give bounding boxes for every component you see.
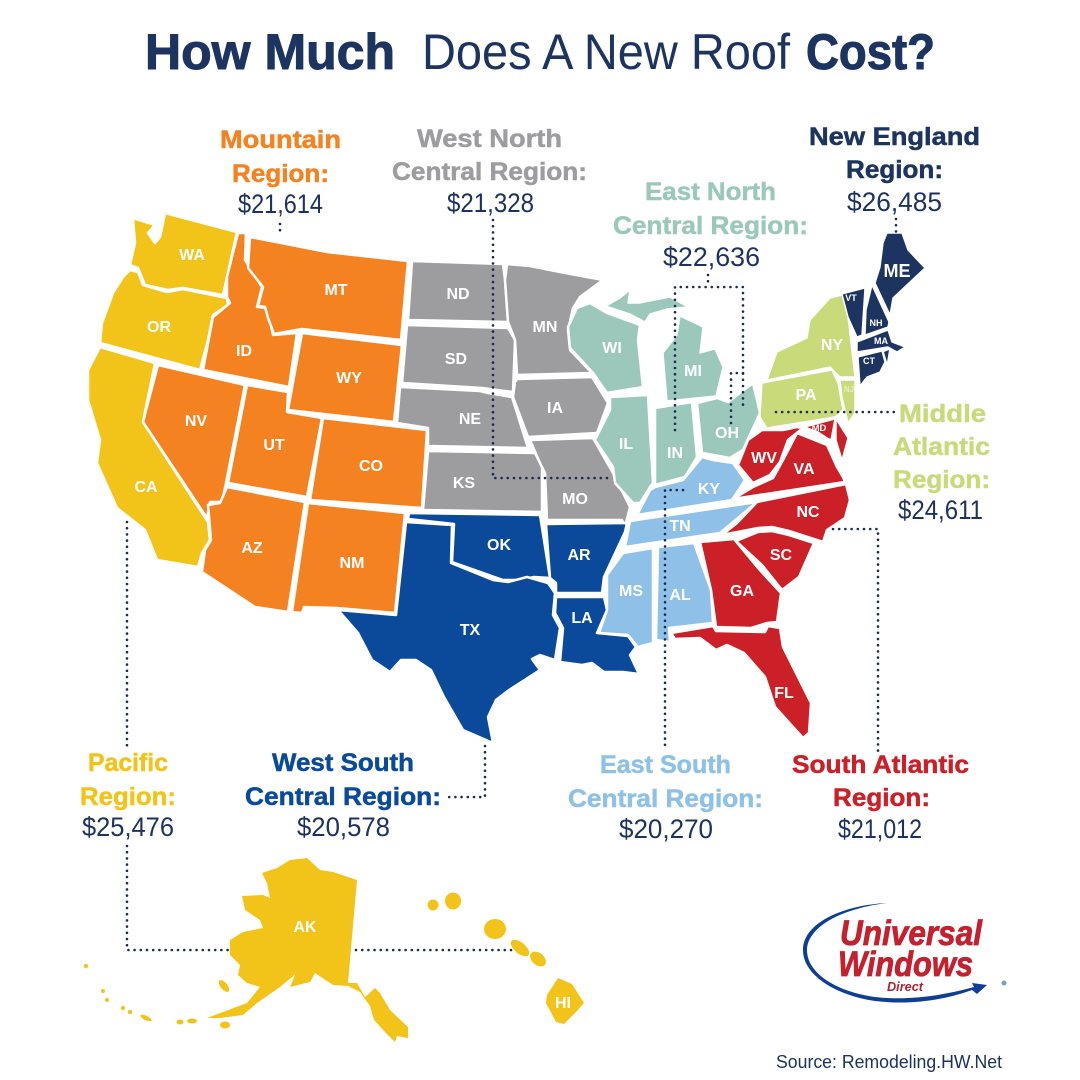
label: West South Central Region: $20,578	[297, 812, 390, 842]
state: WV: WV	[751, 450, 777, 467]
label: East South Central Region	[568, 751, 763, 844]
state: ID: ID	[236, 343, 252, 360]
state: ID	[203, 233, 297, 387]
state: CT: CT	[863, 356, 875, 366]
region: West North Central states	[397, 261, 630, 527]
state: VA: VA	[793, 461, 815, 478]
state: WV	[738, 427, 803, 483]
label: Mountain Region: Region:	[232, 160, 329, 188]
state: IN	[655, 402, 697, 485]
label: East South Central Region: East South	[600, 751, 731, 779]
state: CA: CA	[134, 479, 158, 496]
state: LA: LA	[571, 610, 593, 627]
region: West South Central states	[338, 513, 639, 743]
state: KS: KS	[453, 475, 475, 492]
label: East North Central Region	[613, 178, 808, 272]
state: MA	[857, 330, 905, 352]
state: WA: WA	[179, 247, 205, 264]
state: NC	[722, 484, 850, 542]
state: PA: PA	[795, 387, 817, 404]
state: AZ: AZ	[241, 540, 263, 557]
state: CO	[310, 418, 427, 508]
map: Hawaii: HI	[555, 995, 571, 1012]
state: WI	[568, 303, 643, 393]
state: AR	[546, 523, 627, 593]
state: MN: MN	[533, 319, 557, 336]
state: MS: MS	[619, 583, 643, 600]
region: East North Central states	[568, 290, 760, 503]
title: Cost?	[806, 24, 935, 80]
state: MN	[505, 264, 603, 375]
label: Pacific Region: Region:	[80, 783, 176, 811]
state: NV: NV	[185, 413, 207, 430]
state: TX	[338, 522, 560, 743]
state: FL: FL	[774, 685, 794, 702]
state: UT	[228, 385, 322, 497]
state: UT: UT	[263, 437, 285, 454]
state: NM: NM	[340, 555, 364, 572]
title	[145, 24, 935, 80]
state: TX: TX	[460, 622, 481, 639]
state: IL	[595, 395, 653, 503]
region: Middle Atlantic states	[760, 295, 855, 428]
label: Pacific Region	[80, 749, 176, 842]
state: SD: SD	[445, 351, 467, 368]
state: GA: GA	[730, 583, 754, 600]
state: CO: CO	[359, 458, 383, 475]
logo: Universal Windows Direct: Universal	[840, 914, 983, 953]
state: VT: VT	[845, 293, 857, 303]
label: South Atlantic Region: Region:	[833, 784, 930, 812]
state: WI: WI	[602, 340, 622, 357]
state: NE	[397, 387, 528, 448]
label: West North Central Region	[392, 125, 587, 218]
label: West South Central Region	[245, 749, 441, 842]
state: VT	[842, 288, 865, 337]
state: NM	[292, 503, 405, 613]
label: East South Central Region: $20,270	[619, 814, 713, 844]
label: West North Central Region: West North	[417, 125, 562, 153]
state: LA	[555, 597, 639, 674]
label: West South Central Region: Central Region:	[245, 783, 441, 811]
state: KY: KY	[698, 481, 720, 498]
state: NE: NE	[459, 411, 481, 428]
state: AL: AL	[669, 587, 691, 604]
region: South Atlantic states	[671, 419, 850, 738]
state: CT	[858, 351, 885, 386]
region: New England states	[842, 233, 925, 386]
state: OK	[408, 513, 550, 580]
state: SC: SC	[770, 547, 793, 564]
state: AR: AR	[567, 547, 591, 564]
alaska islands	[84, 964, 231, 1028]
label: East South Central Region: Central Region:	[568, 785, 763, 813]
state: NV	[143, 365, 245, 518]
connector lines	[127, 219, 896, 950]
state: TN	[625, 502, 757, 547]
state: NC: NC	[796, 504, 820, 521]
label: West North Central Region: $21,328	[447, 188, 534, 218]
logo swoosh arrow	[803, 903, 987, 1003]
state: KY	[637, 457, 745, 515]
label: New England Region	[809, 123, 980, 217]
state: CA	[88, 347, 210, 567]
state: MA: MA	[874, 336, 888, 346]
state: OH: OH	[715, 425, 739, 442]
logo: Universal Windows Direct	[803, 903, 1006, 1003]
map: Hawaii	[428, 892, 584, 1024]
label: West North Central Region: Central Region:	[392, 158, 587, 186]
label: Middle Atlantic Region: Atlantic	[893, 433, 990, 461]
state: WA	[130, 213, 237, 295]
state: NJ: NJ	[844, 385, 854, 394]
state: IA: IA	[547, 400, 563, 417]
state: SC	[736, 531, 814, 590]
label: Middle Atlantic Region: Middle	[899, 400, 986, 428]
map: contiguous states	[88, 213, 925, 743]
label: Middle Atlantic Region	[893, 400, 990, 525]
state: MT: MT	[324, 282, 348, 299]
map: Alaska	[84, 858, 408, 1042]
state: SD	[402, 325, 515, 392]
state: RI	[884, 350, 889, 362]
label: New England Region: $26,485	[847, 187, 942, 217]
label: New England Region: New England	[809, 123, 980, 151]
state: MD: MD	[812, 423, 827, 434]
state: IA	[513, 377, 608, 437]
region: Mountain states	[143, 233, 427, 613]
label: East North Central Region: Central Region:	[613, 212, 808, 240]
label: South Atlantic Region	[792, 751, 969, 844]
title: How Much	[145, 24, 395, 80]
state: ND	[408, 261, 508, 322]
state: WY: WY	[336, 370, 362, 387]
label: East North Central Region: $22,636	[663, 242, 760, 272]
label: Mountain Region: $21,614	[238, 189, 323, 219]
state: IL: IL	[619, 436, 633, 453]
state: WY	[288, 333, 402, 422]
state: GA	[700, 539, 781, 628]
state: ME: ME	[884, 261, 910, 281]
state: FL	[671, 626, 811, 738]
state: TN: TN	[669, 518, 691, 535]
state: OR	[100, 270, 228, 370]
state: ME	[875, 233, 925, 315]
label: Pacific Region: Pacific	[88, 749, 168, 777]
state: MO: MO	[562, 491, 588, 508]
label: Middle Atlantic Region: Region:	[893, 466, 990, 494]
source note: Source: Remodeling.HW.Net	[776, 1051, 1002, 1072]
label: Mountain Region: Mountain	[220, 126, 341, 154]
state: NH: NH	[870, 318, 882, 328]
label: Pacific Region: $25,476	[82, 812, 174, 842]
label: South Atlantic Region: $21,012	[838, 814, 922, 844]
state: MI	[606, 290, 723, 401]
label: Mountain Region	[220, 126, 341, 219]
state: ND: ND	[446, 286, 470, 303]
logo: Universal Windows Direct: Direct	[887, 979, 924, 994]
state: IN: IN	[667, 445, 683, 462]
region: East South Central states	[599, 457, 757, 647]
state: NH	[865, 285, 889, 335]
label: New England Region: Region:	[846, 156, 943, 184]
label: Middle Atlantic Region: $24,611	[898, 495, 983, 525]
state: MT	[248, 237, 408, 340]
map: Alaska: AK	[293, 919, 317, 936]
label: South Atlantic Region: South Atlantic	[792, 751, 969, 779]
state: KS	[423, 451, 542, 512]
state: MD	[805, 419, 848, 460]
label: East North Central Region: East North	[645, 178, 776, 206]
state: NY: NY	[821, 337, 843, 354]
state: AL	[656, 543, 713, 642]
state: MO	[530, 438, 630, 527]
label: West South Central Region: West South	[272, 749, 414, 777]
logo: Universal Windows Direct: Windows	[838, 945, 973, 984]
state: VA	[733, 433, 845, 499]
state: OR: OR	[147, 319, 171, 336]
state: MS	[599, 548, 653, 647]
state: OK: OK	[487, 537, 511, 554]
state: AZ	[202, 487, 305, 612]
state: OH	[697, 383, 760, 458]
title: Does A New Roof	[422, 24, 790, 80]
region: Pacific states	[88, 213, 237, 567]
state: MI: MI	[684, 363, 702, 380]
